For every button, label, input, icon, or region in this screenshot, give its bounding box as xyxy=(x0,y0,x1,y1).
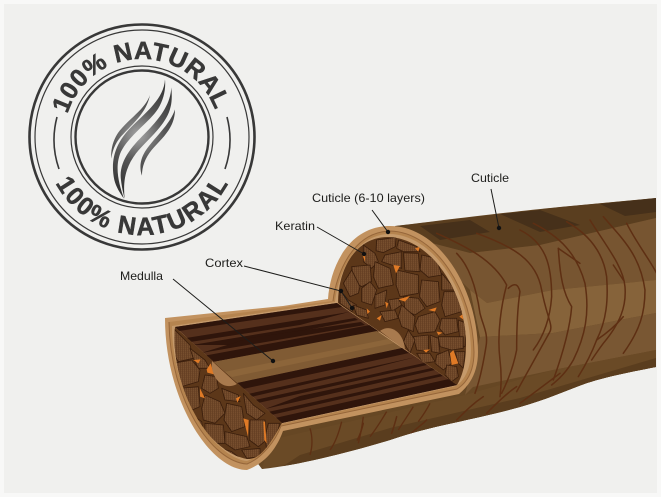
icon: hair strands xyxy=(111,79,175,199)
hair shaft: outer cuticle xyxy=(258,198,656,469)
label: Medulla xyxy=(120,269,275,363)
label: Cuticle: Cuticle xyxy=(471,171,509,185)
label: Cuticle (6-10 layers) xyxy=(312,191,425,234)
medulla dome, rear xyxy=(380,328,405,350)
cut rim: cuticle layers xyxy=(165,226,478,470)
shaft colour bands xyxy=(395,198,656,253)
upper fibre section xyxy=(175,303,379,362)
medulla dome, front xyxy=(212,361,237,386)
label: Keratin xyxy=(275,219,366,256)
label: Cortex xyxy=(205,256,354,310)
lower fibre section xyxy=(237,348,460,425)
label: Cuticle (6-10 layers): Cuticle (6-10 layers) xyxy=(312,191,425,205)
badge: 100% natural xyxy=(28,23,256,251)
medulla band xyxy=(213,331,402,383)
medulla plane: fibre layers xyxy=(170,298,460,425)
cortex: rear cross-section xyxy=(338,237,466,385)
label: Medulla: Medulla xyxy=(120,269,163,283)
keratin cells, rear xyxy=(340,237,467,382)
orange intercellular patches xyxy=(362,247,464,365)
side arcs xyxy=(54,117,230,169)
label: Cuticle xyxy=(471,171,509,230)
top ring text: 100% NATURAL xyxy=(53,42,227,113)
label: Keratin: Keratin xyxy=(275,219,315,233)
cuticle scale lines xyxy=(357,217,657,440)
cortex: front cross-section xyxy=(174,327,282,459)
keratin cells, front xyxy=(172,327,280,458)
orange intercellular patches, front xyxy=(193,359,267,443)
bottom ring text: 100% NATURAL xyxy=(56,176,228,236)
label: Cortex: Cortex xyxy=(205,256,243,270)
